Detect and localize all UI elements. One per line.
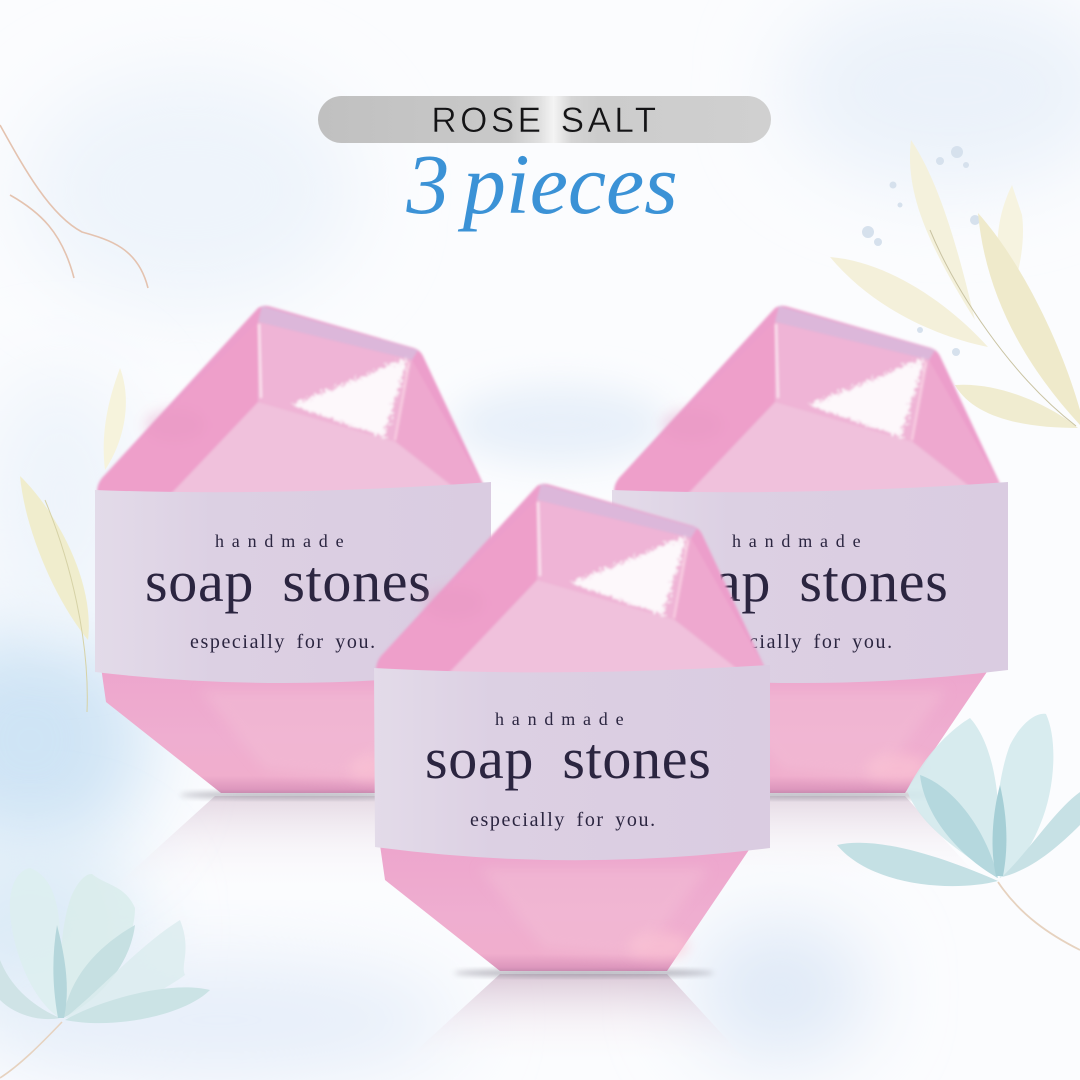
soap: front centre — [374, 484, 770, 977]
title: 3 pieces: 3 pieces — [405, 136, 678, 232]
label text: soap stones — [145, 549, 432, 614]
decoration: leaves right — [830, 140, 1080, 428]
label text — [145, 531, 432, 653]
label text: handmade — [495, 709, 631, 729]
soap: back right — [612, 306, 1008, 799]
label text: soap stones — [662, 549, 949, 614]
label text — [425, 709, 712, 831]
pill: ROSE SALT heading — [318, 96, 771, 143]
label text — [662, 531, 949, 653]
reflection: floor under soaps — [100, 796, 990, 1070]
flower: right teal lotus — [837, 714, 1080, 950]
label text: especially for you. — [190, 631, 377, 653]
label text: soap stones — [425, 726, 712, 791]
decoration: copper twig top left — [0, 125, 148, 288]
flower: left teal lotus — [0, 868, 210, 1078]
label band — [612, 482, 1008, 683]
label band — [95, 482, 491, 683]
decoration: leaves left — [20, 368, 126, 712]
label band — [374, 665, 770, 860]
pill: ROSE SALT heading: ROSE SALT — [431, 101, 660, 140]
label text: handmade — [215, 531, 351, 551]
label text: handmade — [732, 531, 868, 551]
soap: back left — [95, 306, 491, 799]
label text: especially for you. — [470, 809, 657, 831]
label text: especially for you. — [707, 631, 894, 653]
